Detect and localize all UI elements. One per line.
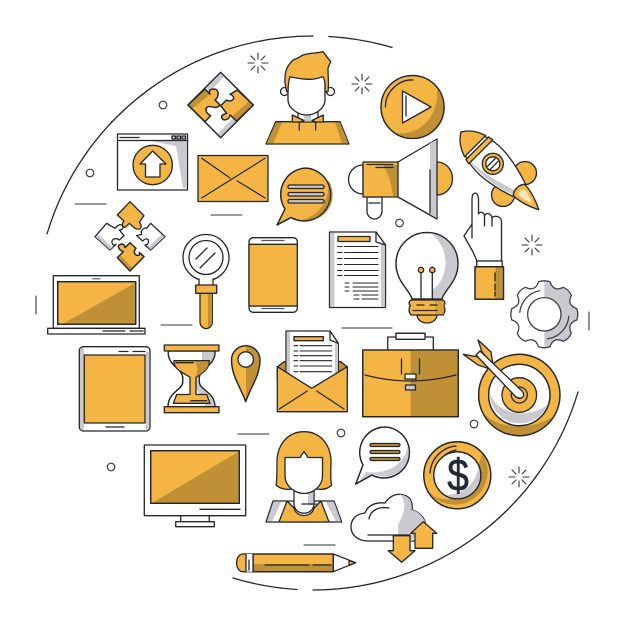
icon: jigsaw diamond xyxy=(188,72,253,138)
icon: desktop monitor xyxy=(144,445,246,527)
icon: man avatar xyxy=(266,52,349,144)
icon: smartphone xyxy=(249,238,297,312)
icon: play button xyxy=(381,76,445,139)
icon: orange speech bubble xyxy=(277,168,333,225)
icon: browser window with upload arrow xyxy=(118,134,188,190)
icon: rocket xyxy=(449,120,551,222)
dollar sign: $ xyxy=(447,450,469,500)
icon: magnifying glass xyxy=(183,234,229,329)
icon: pencil xyxy=(237,554,356,572)
icon: gear xyxy=(511,281,578,348)
icon: white speech bubble xyxy=(356,427,410,484)
icon: location pin xyxy=(232,346,260,402)
icon: hourglass xyxy=(164,345,219,413)
icon: dollar coin xyxy=(424,442,491,509)
icon: tablet xyxy=(79,347,150,431)
icon: target with arrow xyxy=(463,340,560,436)
icon: open envelope with letter xyxy=(277,331,347,412)
icon: jigsaw cross xyxy=(95,202,165,271)
icon: megaphone xyxy=(348,139,452,219)
icon: briefcase xyxy=(363,333,458,417)
icon: closed envelope xyxy=(198,156,268,202)
icon: woman avatar xyxy=(266,432,342,522)
icon: text document xyxy=(330,232,386,308)
icon: cloud with upload and download arrows xyxy=(351,494,437,562)
circular outline arcs xyxy=(47,36,578,590)
icon: laptop xyxy=(48,276,145,334)
icon: pointing hand with cuff xyxy=(464,193,504,299)
decorative stars, dots and dashes xyxy=(36,53,589,545)
icon: light bulb xyxy=(396,232,458,323)
